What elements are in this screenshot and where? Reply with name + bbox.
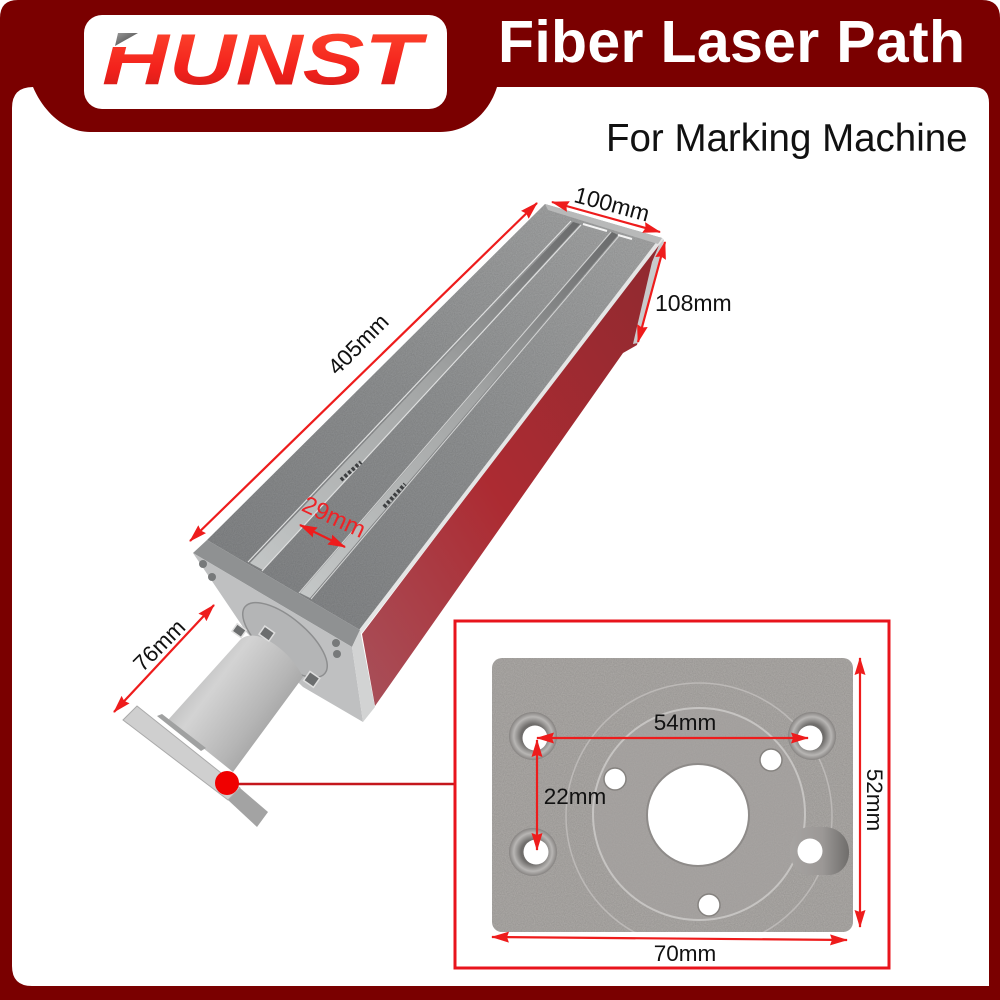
end face xyxy=(193,553,363,722)
dimension: 22mm xyxy=(537,740,606,850)
subtitle: For Marking Machine xyxy=(606,117,968,160)
top face right edge highlight xyxy=(360,238,662,632)
red side face xyxy=(362,238,662,706)
foot plate xyxy=(123,706,240,800)
small through holes xyxy=(604,749,782,916)
top groove two xyxy=(299,232,619,599)
far end bright slots xyxy=(583,224,632,239)
flange bolts xyxy=(232,624,320,687)
dimension: 76mm: 76mm xyxy=(128,614,190,676)
dimension: 22mm: 22mm xyxy=(544,784,606,809)
dimension: 108mm: 108mm xyxy=(655,290,732,316)
dimension: 70mm: 70mm xyxy=(654,941,716,966)
countersinks xyxy=(509,712,836,876)
callout connector xyxy=(215,771,455,795)
mounting plate xyxy=(492,658,853,932)
end cap top strip xyxy=(193,540,360,647)
foot plate underside xyxy=(228,788,268,827)
dimension: 70mm xyxy=(492,937,847,966)
dimension: 76mm xyxy=(114,605,214,712)
far end lip xyxy=(545,204,662,244)
flange disc xyxy=(231,590,339,690)
mounting holes xyxy=(522,726,822,864)
dimension: 108mm xyxy=(638,242,732,342)
dimension: 405mm: 405mm xyxy=(323,309,394,380)
cylinder xyxy=(168,635,303,772)
logo cut above first stem xyxy=(102,29,141,47)
plate outer ring xyxy=(566,683,832,949)
dimension: 405mm xyxy=(190,203,537,541)
dimension: 100mm xyxy=(552,182,660,232)
top face xyxy=(207,204,662,630)
dimension: 54mm: 54mm xyxy=(654,710,716,735)
logo wordmark: HUNST xyxy=(102,20,429,100)
corner boss xyxy=(790,827,849,875)
center bore xyxy=(647,764,749,866)
top groove one xyxy=(248,221,581,571)
logo accent triangle xyxy=(115,33,138,46)
inset panel: mounting plate detail xyxy=(455,621,889,968)
dimension: 52mm: 52mm xyxy=(862,769,887,831)
end face right strip xyxy=(352,630,375,722)
title: Fiber Laser Path xyxy=(498,9,965,75)
end face screws xyxy=(199,560,341,658)
dimension: 29mm: 29mm xyxy=(298,491,370,544)
slot marks on grooves xyxy=(341,462,405,507)
logo panel xyxy=(84,15,447,109)
foot collar xyxy=(157,714,206,751)
laser path tube xyxy=(123,204,664,827)
plate inner ring xyxy=(593,708,805,920)
far end side strip xyxy=(633,238,664,344)
dimension: 100mm: 100mm xyxy=(572,182,652,226)
